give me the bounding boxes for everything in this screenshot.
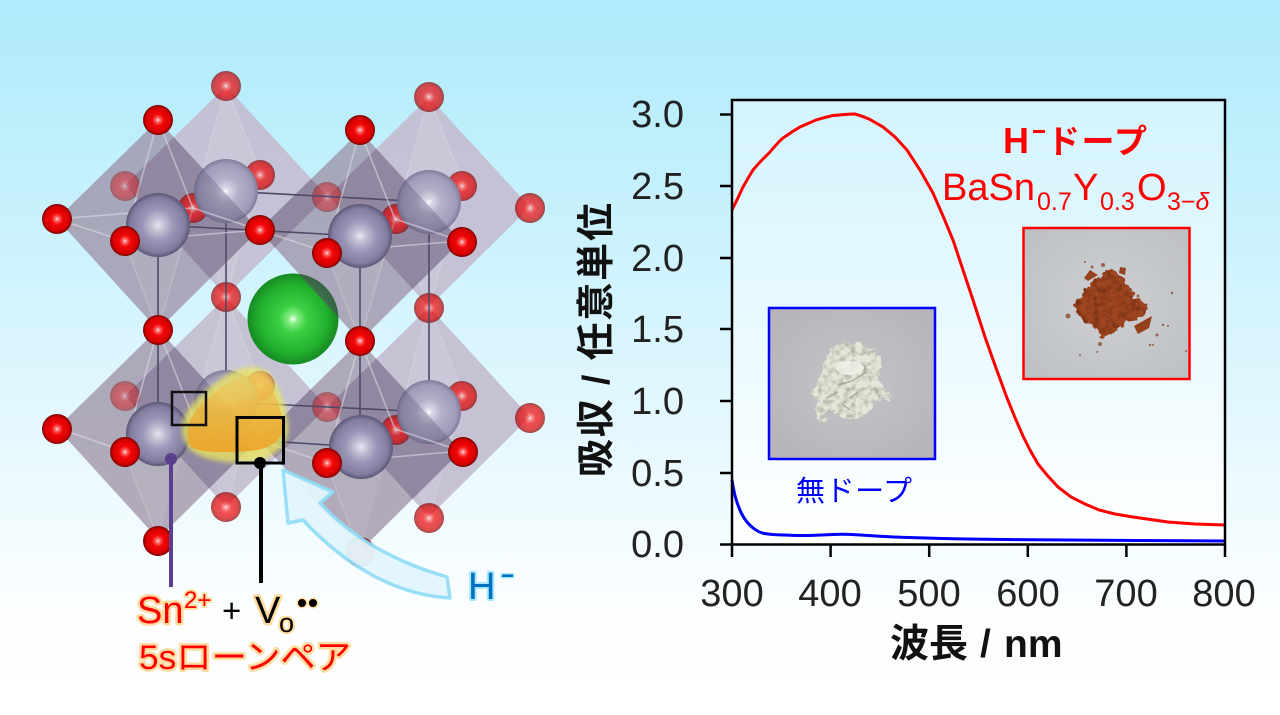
back oxygen atoms at tips <box>211 71 545 533</box>
x axis title: / <box>980 623 991 666</box>
label: H- doped title: ドープ <box>1047 123 1147 160</box>
label: Sn2+ + Vo: + <box>222 592 241 629</box>
label: Sn2+ + Vo <box>137 587 317 638</box>
x axis title: 波長 <box>890 623 968 666</box>
photo: hydride doped powder <box>1024 228 1190 379</box>
plot area <box>732 100 1225 544</box>
photo: undoped powder <box>769 308 935 459</box>
label: 5s lone pair: 5sローンペア <box>139 639 351 677</box>
lighter wedges of front octahedra <box>124 208 395 551</box>
y axis numbers: 2.5 <box>631 166 684 208</box>
label: undoped: 無ドープ <box>796 475 912 508</box>
y axis numbers: 1.5 <box>631 309 684 351</box>
green barium atom <box>248 274 338 364</box>
bonds between tin atoms <box>158 191 429 447</box>
label: chemical formula: Y <box>1073 167 1098 209</box>
label: chemical formula: BaSn <box>942 167 1035 209</box>
axes frame and ticks <box>720 100 1225 557</box>
y axis numbers: 3.0 <box>631 94 684 136</box>
octahedra edge lines <box>57 120 461 552</box>
y axis numbers: 1.0 <box>631 381 684 423</box>
label: chemical formula: 0.7 <box>1037 188 1072 216</box>
label: Sn2+ + Vo: o <box>279 608 294 638</box>
y axis numbers: 0.0 <box>631 524 684 566</box>
label: H- doped title <box>1003 120 1147 161</box>
crystal structure diagram <box>42 71 545 567</box>
y axis numbers: 0.5 <box>631 453 684 495</box>
black square: small <box>172 392 206 425</box>
front oxygen atoms <box>42 105 478 567</box>
y axis numbers <box>631 94 684 566</box>
arrow: hydride entering <box>283 470 450 598</box>
x axis numbers: 600 <box>996 573 1060 615</box>
label: Sn2+ + Vo: Sn <box>137 590 183 632</box>
label: chemical formula: 3− <box>1167 188 1196 216</box>
red curve: H- doped <box>732 114 1225 525</box>
label: H minus <box>468 566 513 608</box>
overlap shading of octahedra <box>126 137 452 499</box>
black square: vacancy <box>237 418 284 463</box>
label: chemical formula: O <box>1137 167 1167 209</box>
black leader line <box>254 457 266 583</box>
x axis numbers: 800 <box>1192 573 1256 615</box>
label: Sn2+ + Vo: V <box>255 590 281 632</box>
shading over back spheres <box>194 159 461 444</box>
x axis numbers: 400 <box>798 573 862 615</box>
label: H minus: H <box>468 566 495 608</box>
back tin atoms <box>194 159 461 444</box>
label: chemical formula: δ <box>1196 188 1211 216</box>
x axis title <box>890 623 1062 666</box>
back row octahedra <box>125 86 530 517</box>
absorption chart <box>576 94 1256 666</box>
blue curve: undoped <box>732 480 1225 541</box>
label: H- doped title: H <box>1003 120 1029 161</box>
y axis numbers: 2.0 <box>631 238 684 280</box>
x axis numbers: 500 <box>897 573 961 615</box>
y axis title: 吸収 / 任意単位 <box>576 203 618 477</box>
x axis numbers <box>700 573 1256 615</box>
purple leader line <box>165 453 177 587</box>
x axis numbers: 300 <box>700 573 764 615</box>
x axis numbers: 700 <box>1094 573 1158 615</box>
label: Sn2+ + Vo: 2+ <box>184 587 211 614</box>
lone pair orbital blob <box>182 367 288 463</box>
label: chemical formula: 0.3 <box>1100 188 1135 216</box>
front row octahedra <box>57 120 461 551</box>
front tin atoms <box>126 193 393 479</box>
inner dimmed oxygen atoms <box>110 171 411 445</box>
x axis title: nm <box>1004 623 1062 666</box>
